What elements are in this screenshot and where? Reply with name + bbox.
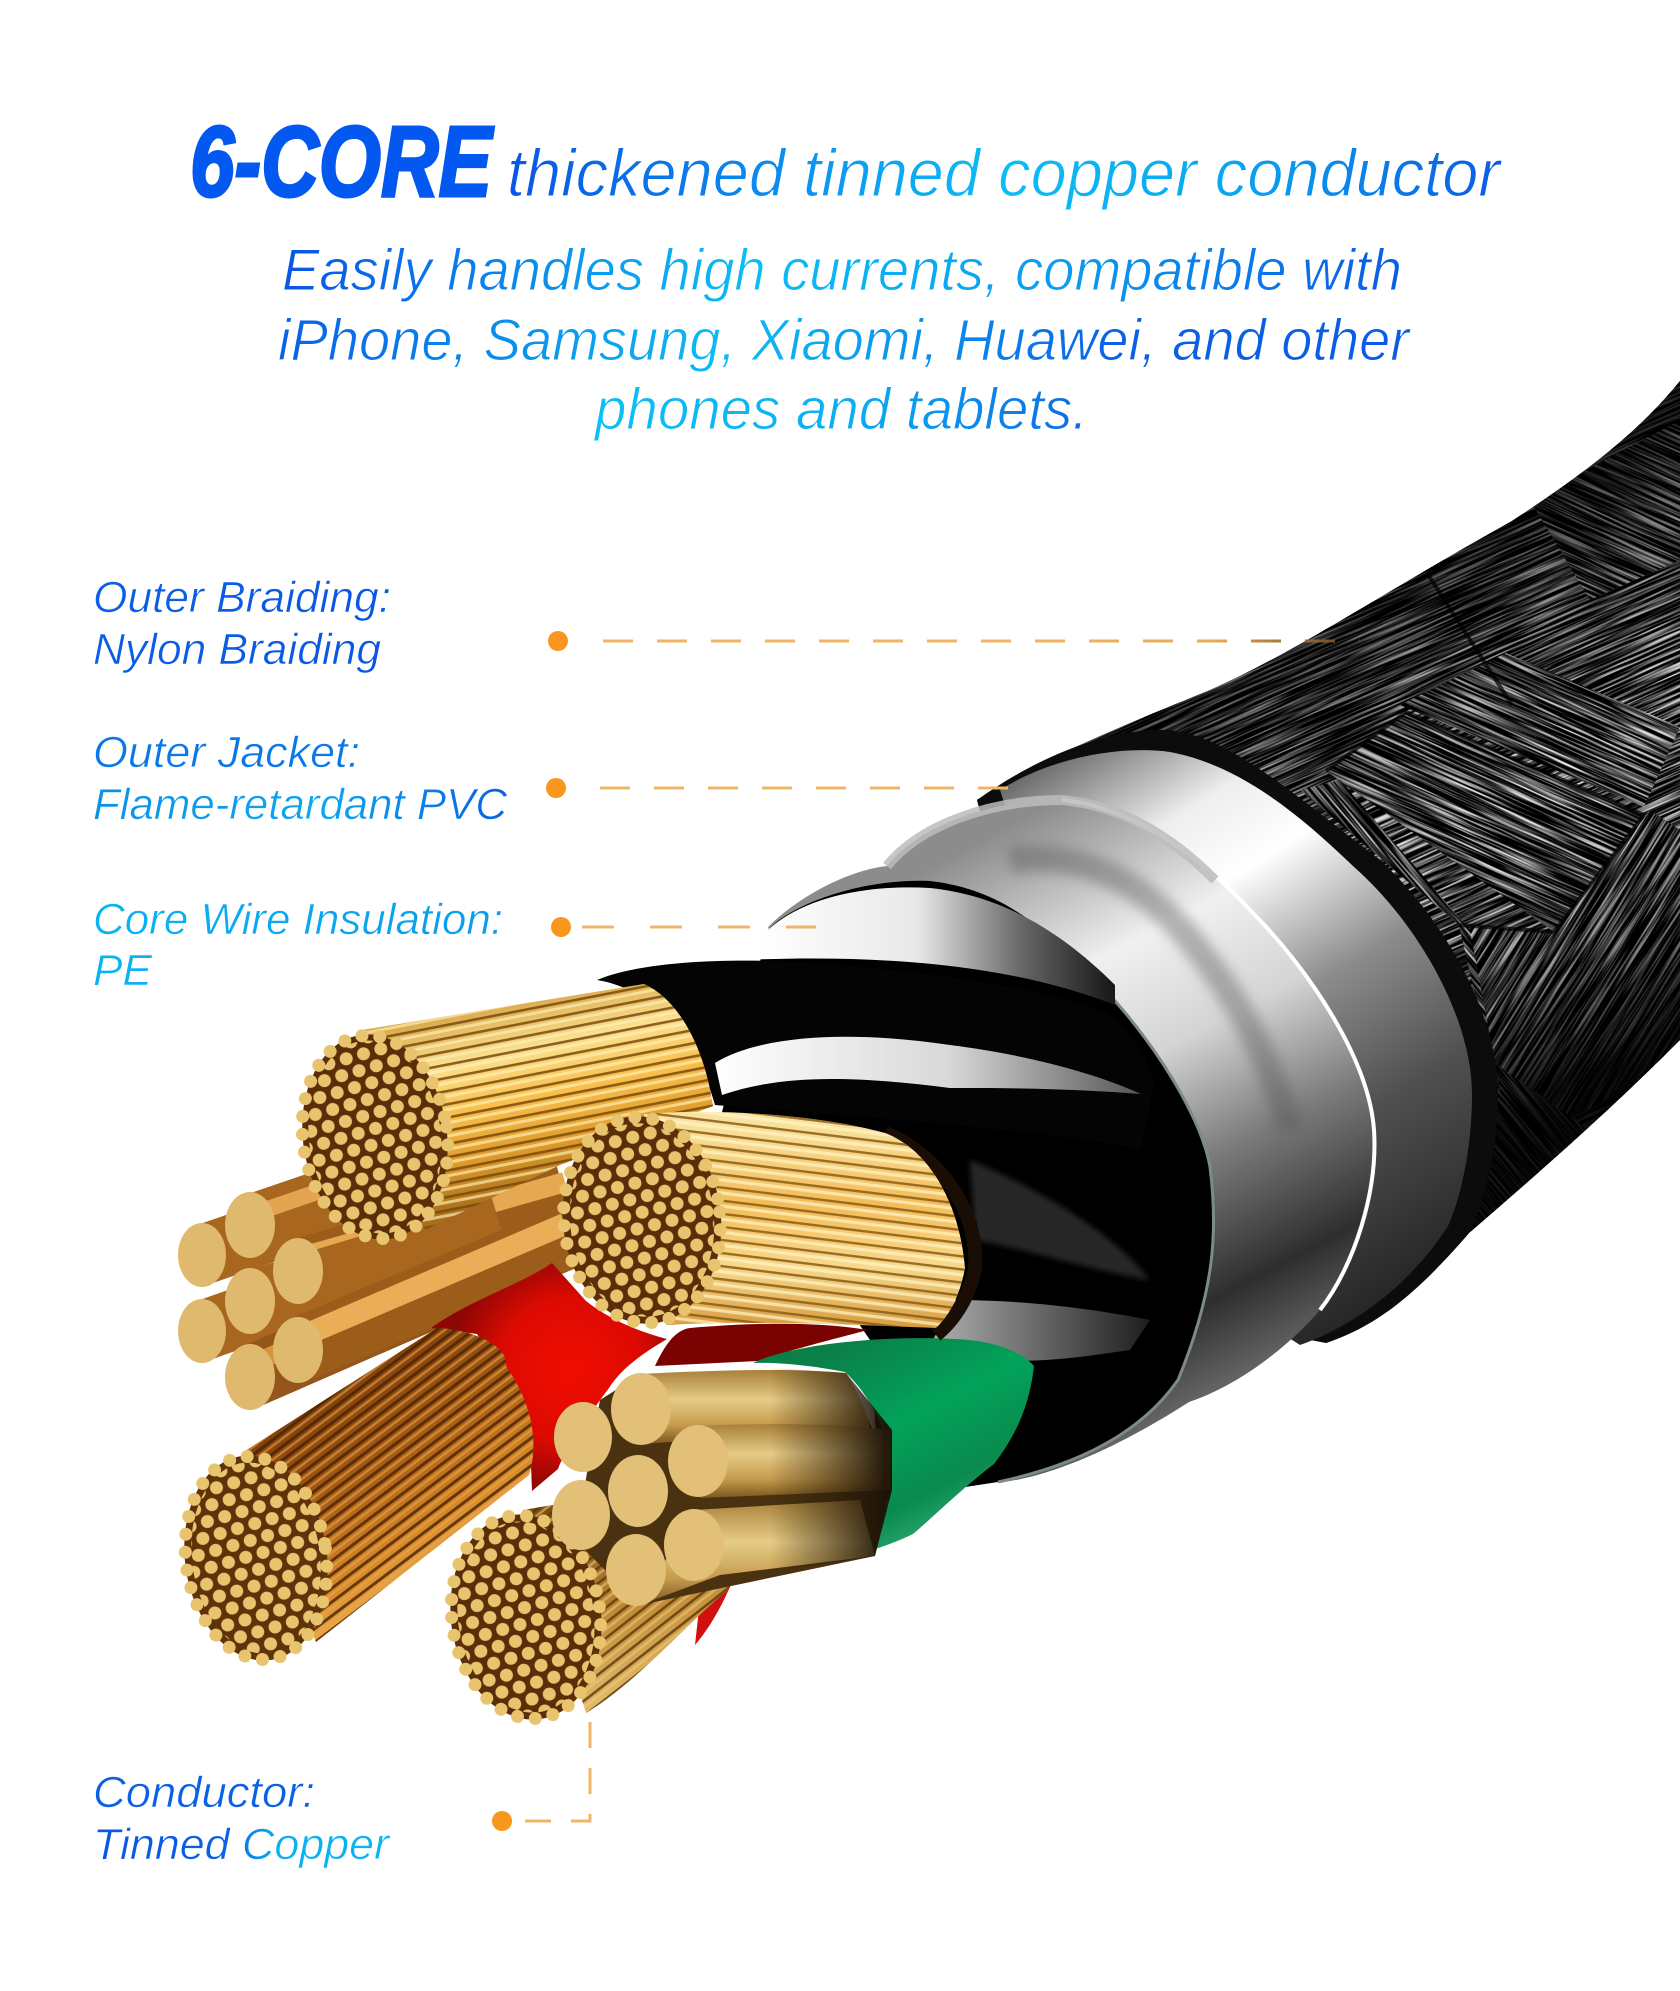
- label: outer braiding: Nylon Braiding: [93, 625, 382, 674]
- leader line: core wire insulation: [551, 917, 816, 937]
- leader line: outer braiding: [548, 631, 1360, 651]
- label: core wire insulation: PE: [93, 946, 153, 995]
- black collar ring: [977, 730, 1498, 1343]
- cable mouth interior: [720, 881, 1214, 1500]
- label: outer braiding: [93, 573, 391, 674]
- black core wire: [597, 961, 1154, 1149]
- fine strand bundle F, lower middle: [437, 1480, 735, 1729]
- dark red core behind: [655, 1324, 868, 1366]
- thick copper bundle, upper left: [178, 1150, 565, 1410]
- leader line: outer jacket: [546, 778, 1027, 798]
- label: conductor: Tinned Copper: [93, 1820, 391, 1869]
- label: outer jacket: Flame-retardant PVC: [93, 780, 508, 829]
- red core insulation: [431, 1263, 667, 1491]
- thick copper bundle, green core: [552, 1368, 892, 1606]
- fine strand bundle E, lower left: [171, 1328, 533, 1670]
- green core insulation: [753, 1338, 1034, 1566]
- label: outer braiding: Outer Braiding:: [93, 573, 391, 622]
- second black wire highlight: [930, 1300, 1150, 1361]
- leader line: conductor: [492, 1705, 590, 1831]
- label: core wire insulation: [93, 895, 503, 995]
- subtitle text: Easily handles high currents, compatible with: [282, 238, 1402, 303]
- label: outer jacket: [93, 728, 508, 829]
- title: thickened tinned copper conductor: thickened tinned copper conductor: [507, 136, 1503, 211]
- title: [190, 106, 1503, 218]
- outer jacket silver band: [1000, 750, 1472, 1345]
- label: core wire insulation: Core Wire Insulation:: [93, 895, 503, 944]
- title: 6-CORE: 6-CORE: [190, 106, 495, 218]
- subtitle text: phones and tablets.: [593, 377, 1088, 442]
- black wire highlight: [715, 1037, 1141, 1095]
- silver interior lip: [660, 887, 1115, 1005]
- fine strand bundle B, middle right: [553, 1108, 975, 1335]
- faint gloss on black wires: [970, 1160, 1150, 1280]
- outer nylon braiding: [977, 381, 1680, 1343]
- label: conductor: [93, 1768, 391, 1869]
- subtitle text: [278, 238, 1412, 442]
- jacket lip silver band: [768, 800, 1374, 1482]
- cable cross-section illustration: [178, 381, 1680, 1830]
- fine strand bundle A, top: [289, 984, 713, 1249]
- label: conductor: Conductor:: [93, 1768, 315, 1817]
- subtitle text: iPhone, Samsung, Xiaomi, Huawei, and other: [278, 308, 1412, 373]
- label: outer jacket: Outer Jacket:: [93, 728, 360, 777]
